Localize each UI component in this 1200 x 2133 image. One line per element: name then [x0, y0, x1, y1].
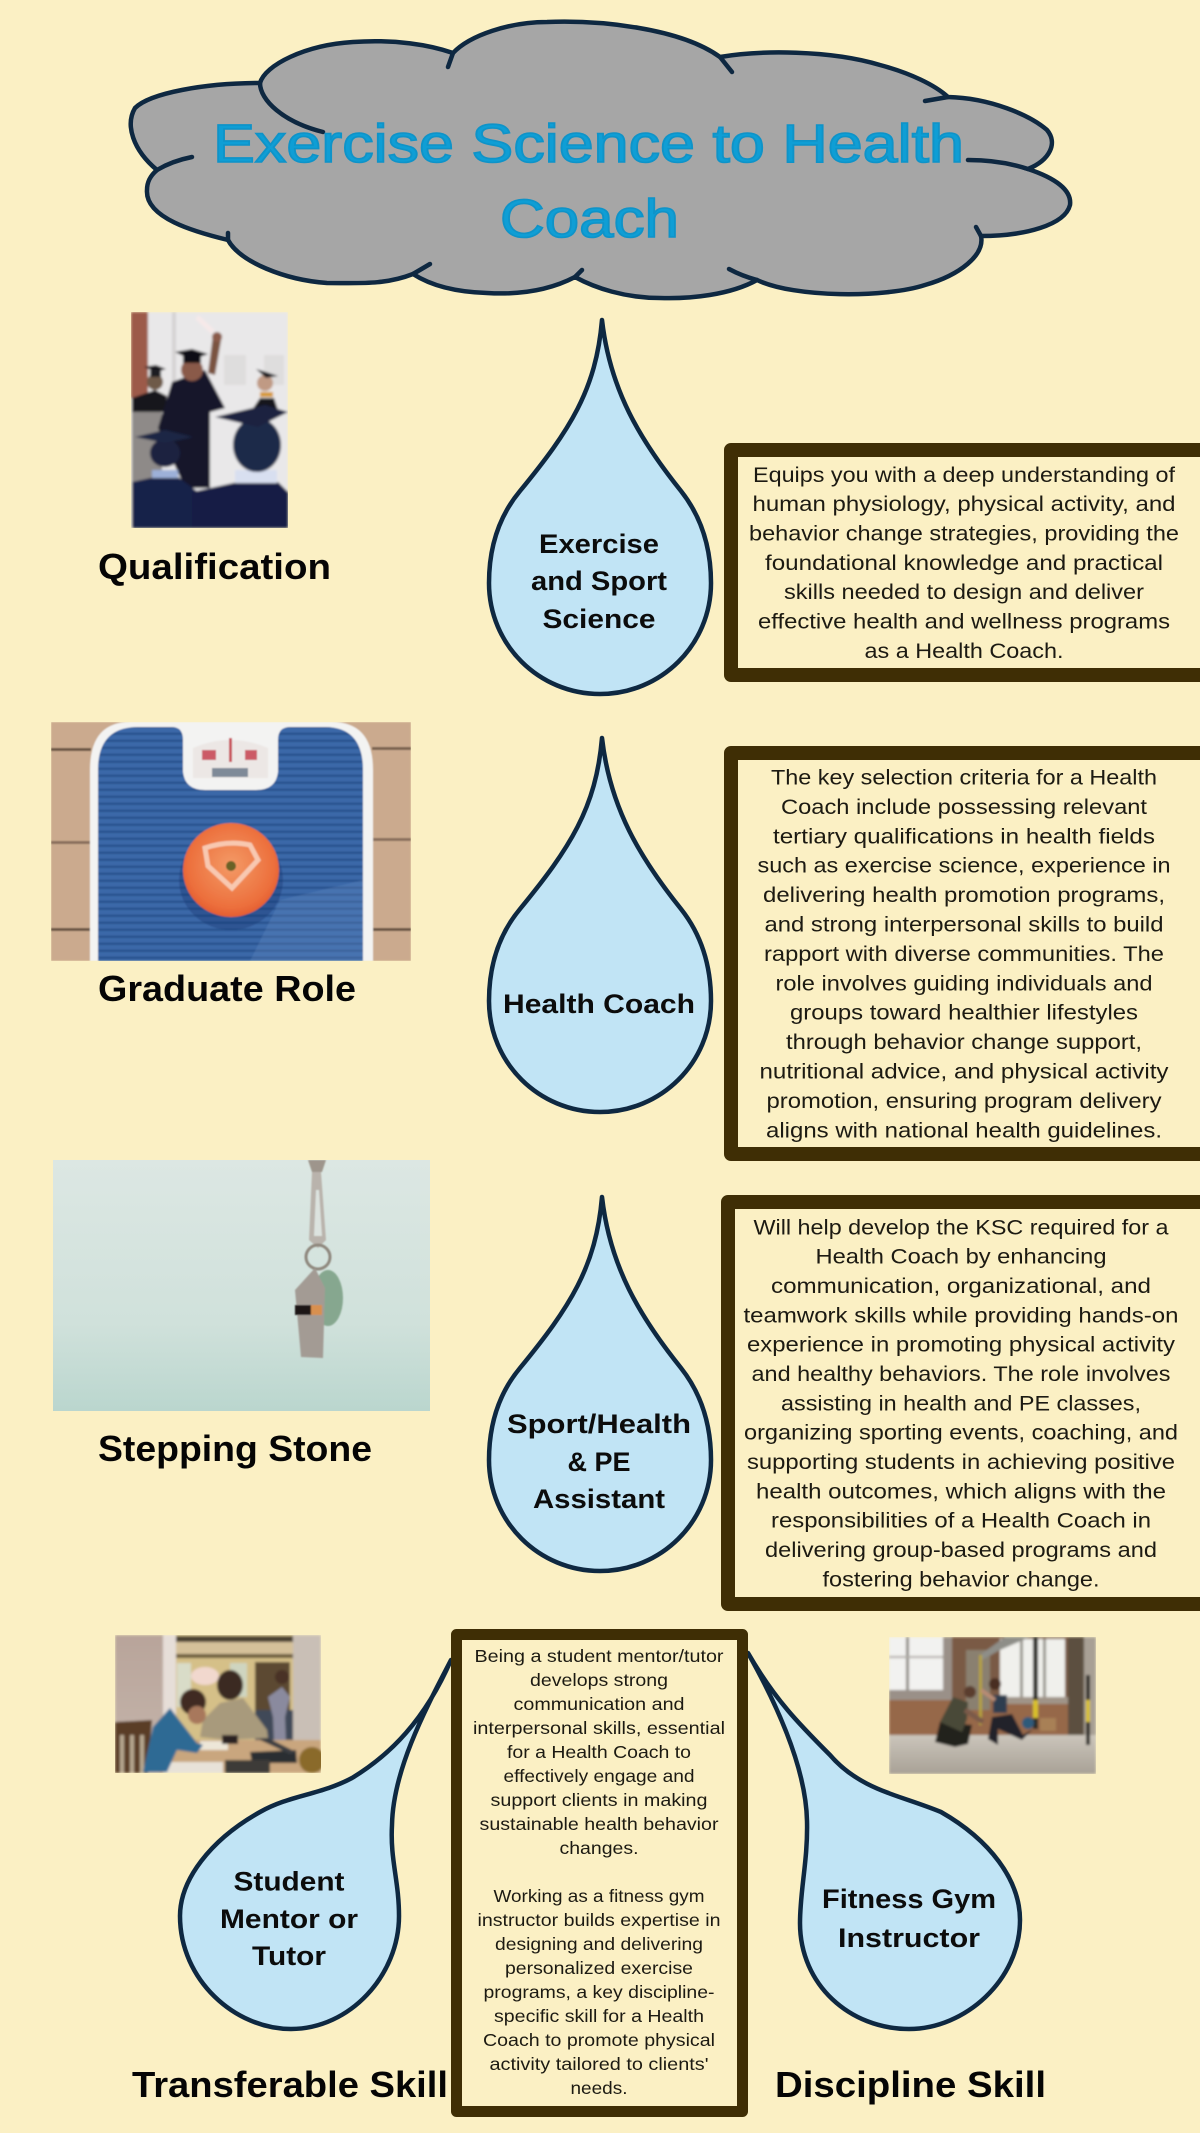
drop: Fitness Gym Instructor: Instructor — [838, 1923, 981, 1953]
text panel: graduate role description: and strong interpersonal skills to build — [764, 914, 1164, 936]
text panel: stepping stone description: health outcomes, which aligns with the — [756, 1480, 1166, 1503]
text panel: graduate role description: The key selection criteria for a Health — [771, 766, 1157, 790]
text panel: graduate role description: groups toward healthier lifestyles — [790, 1002, 1138, 1025]
text panel: stepping stone description: and healthy behaviors. The role involves — [752, 1363, 1170, 1386]
drop: Sport/Health & PE Assistant: Sport/Health — [507, 1409, 691, 1439]
text panel: graduate role description: tertiary qualifications in health fields — [773, 825, 1155, 848]
text panel: qualification description: behavior change strategies, providing the — [749, 523, 1179, 546]
text panel: stepping stone description: Will help develop the KSC required for a — [754, 1216, 1169, 1239]
text panel: qualification description: skills needed to design and deliver — [784, 581, 1144, 604]
photo: whistle — [53, 1160, 430, 1411]
text panel: skills description: needs. — [570, 2078, 628, 2098]
text panel: stepping stone description: assisting in health and PE classes, — [781, 1392, 1141, 1415]
drop: Health Coach: Health Coach — [503, 989, 695, 1019]
label: Qualification: Qualification — [98, 546, 331, 587]
text panel: skills description: support clients in making — [490, 1790, 708, 1810]
title text: Exercise Science to Health — [213, 114, 964, 174]
text panel: graduate role description: aligns with national health guidelines. — [766, 1119, 1162, 1142]
text panel: skills description: Working as a fitness gym — [494, 1886, 704, 1906]
drop: Sport/Health & PE Assistant: Assistant — [533, 1484, 665, 1514]
text panel: skills description: communication and — [514, 1694, 684, 1714]
drop: Student Mentor or Tutor: Mentor or — [220, 1904, 359, 1934]
text panel: stepping stone description: Health Coach by enhancing — [816, 1246, 1106, 1269]
text panel: graduate role description: nutritional advice, and physical activity — [760, 1060, 1169, 1084]
photo: graduation — [131, 312, 288, 528]
drop: Student Mentor or Tutor — [180, 1660, 451, 2029]
text panel: stepping stone description: fostering behavior change. — [822, 1568, 1100, 1591]
text panel: graduate role description: through behavior change support, — [786, 1031, 1142, 1054]
text panel: stepping stone description: experience in promoting physical activity — [747, 1334, 1176, 1357]
text panel: skills description: effectively engage and — [504, 1766, 694, 1786]
title cloud — [131, 22, 1070, 298]
drop: Exercise and Sport Science — [489, 320, 711, 694]
text panel: stepping stone description: supporting students in achieving positive — [747, 1451, 1175, 1474]
drop: Fitness Gym Instructor — [748, 1653, 1020, 2029]
text panel: stepping stone description: communication, organizational, and — [771, 1275, 1151, 1298]
text panel: skills description: for a Health Coach to — [507, 1742, 691, 1762]
text panel: stepping stone description — [728, 1202, 1200, 1604]
text panel: stepping stone description: organizing sporting events, coaching, and — [744, 1422, 1178, 1445]
text panel: skills description: Being a student mentor/tutor — [474, 1646, 724, 1666]
text panel: qualification description: effective health and wellness programs — [758, 610, 1170, 634]
text panel: stepping stone description: responsibilities of a Health Coach in — [771, 1510, 1151, 1533]
title text — [213, 114, 964, 249]
text panel: skills description: Coach to promote physical — [483, 2030, 715, 2050]
text panel: skills description: programs, a key discipline- — [484, 1982, 715, 2002]
text panel: graduate role description: role involves guiding individuals and — [776, 972, 1152, 995]
text panel: skills description: instructor builds expertise in — [478, 1910, 720, 1930]
text panel: skills description — [456, 1634, 742, 2112]
text panel: graduate role description: rapport with diverse communities. The — [764, 943, 1164, 966]
text panel: stepping stone description: delivering group-based programs and — [765, 1539, 1157, 1562]
title text: Coach — [500, 189, 679, 249]
photo: apple on scale — [51, 722, 411, 961]
text panel: graduate role description: promotion, ensuring program delivery — [766, 1090, 1162, 1113]
photo: student mentoring — [115, 1635, 325, 1773]
label: Transferable Skill: Transferable Skill — [132, 2064, 448, 2105]
drop: Student Mentor or Tutor: Tutor — [252, 1941, 327, 1971]
text panel: graduate role description: such as exercise science, experience in — [758, 855, 1170, 878]
text panel: skills description: activity tailored to clients' — [490, 2054, 708, 2074]
drop: Exercise and Sport Science: and Sport — [531, 566, 667, 596]
text panel: skills description: sustainable health behavior — [480, 1814, 719, 1834]
text panel: qualification description: Equips you with a deep understanding of — [753, 464, 1175, 487]
text panel: graduate role description — [731, 753, 1200, 1154]
text panel: graduate role description: Coach include possessing relevant — [781, 796, 1147, 819]
text panel: qualification description: human physiology, physical activity, and — [752, 493, 1176, 516]
drop: Health Coach — [489, 738, 711, 1112]
text panel: skills description: interpersonal skills, essential — [473, 1718, 725, 1738]
text panel: skills description: personalized exercise — [505, 1958, 693, 1978]
drop: Sport/Health & PE Assistant — [489, 1197, 711, 1571]
drop: Sport/Health & PE Assistant: & PE — [568, 1447, 630, 1477]
label: Discipline Skill: Discipline Skill — [775, 2064, 1046, 2105]
text panel: graduate role description: delivering health promotion programs, — [763, 884, 1165, 907]
cloud shape — [131, 22, 1070, 298]
text panel: qualification description: as a Health Coach. — [864, 640, 1064, 663]
text panel: skills description: designing and delivering — [495, 1934, 703, 1954]
text panel: skills description: develops strong — [530, 1670, 668, 1690]
drop: Student Mentor or Tutor: Student — [234, 1866, 344, 1896]
text panel: skills description: changes. — [560, 1838, 638, 1858]
photo: gym training — [889, 1637, 1096, 1774]
drop: Exercise and Sport Science: Science — [542, 604, 656, 634]
text panel: qualification description — [731, 450, 1200, 675]
text panel: skills description: specific skill for a Health — [494, 2006, 704, 2026]
text panel: stepping stone description: teamwork skills while providing hands-on — [744, 1304, 1178, 1327]
drop: Exercise and Sport Science: Exercise — [539, 529, 659, 559]
label: Stepping Stone: Stepping Stone — [98, 1428, 372, 1469]
drop: Fitness Gym Instructor: Fitness Gym — [822, 1884, 996, 1914]
label: Graduate Role: Graduate Role — [98, 968, 356, 1009]
text panel: qualification description: foundational knowledge and practical — [765, 552, 1163, 575]
